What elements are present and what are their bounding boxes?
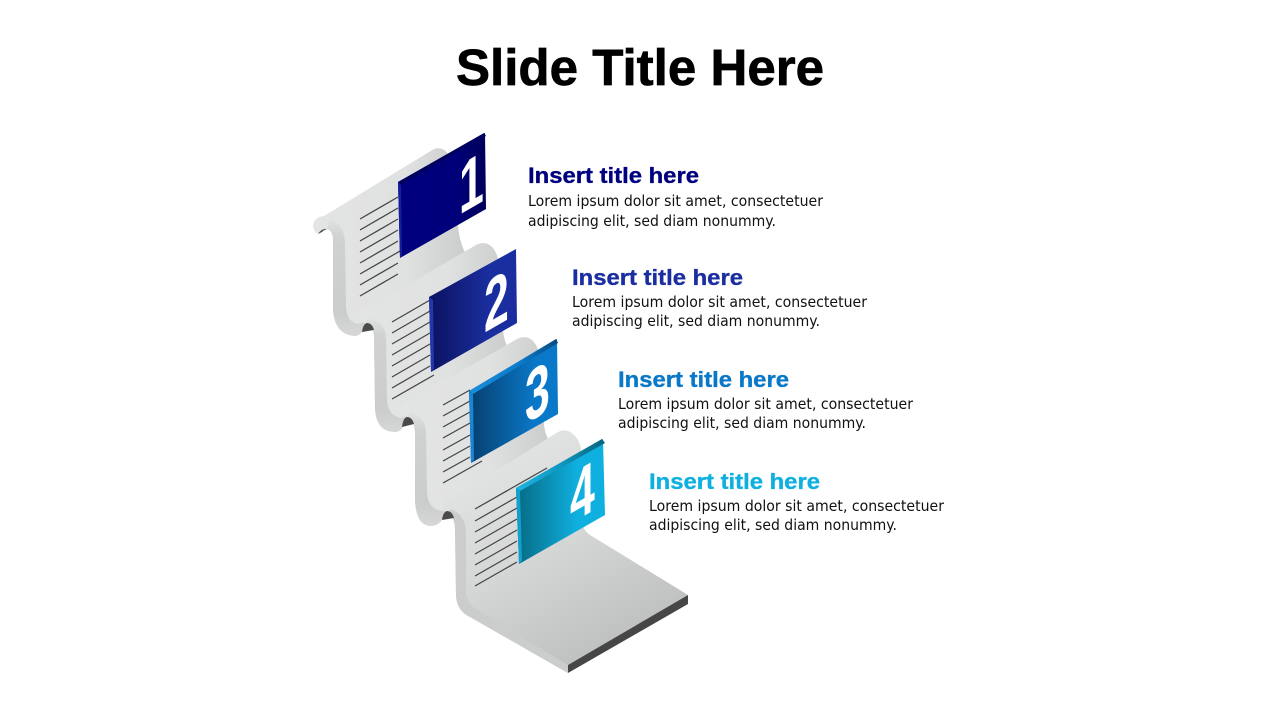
text block 3 xyxy=(618,367,914,432)
text block 3: Insert title here xyxy=(618,367,789,392)
text lines: sheet 2 xyxy=(392,300,434,399)
text block 1: Lorem ipsum dolor sit amet, consectetuer xyxy=(528,192,824,210)
card 4 xyxy=(516,439,605,564)
text block 3: Lorem ipsum dolor sit amet, consectetuer xyxy=(618,395,914,413)
sheet 3 xyxy=(400,337,551,526)
text block 1: Insert title here xyxy=(528,163,699,188)
card 3 xyxy=(469,339,558,463)
text block 4: Insert title here xyxy=(649,469,820,494)
text block 2: Insert title here xyxy=(572,265,743,290)
number 2: 2 xyxy=(484,254,509,349)
number 4: 4 xyxy=(570,445,595,540)
text block 1: adipiscing elit, sed diam nonummy. xyxy=(528,212,776,230)
text block 3: adipiscing elit, sed diam nonummy. xyxy=(618,414,866,432)
sheet 4 xyxy=(442,430,688,673)
text lines: sheet 1 xyxy=(360,197,428,296)
text block 2: adipiscing elit, sed diam nonummy. xyxy=(572,312,820,330)
card 1 xyxy=(398,133,486,258)
text block 1 xyxy=(528,163,824,230)
sheet 2 xyxy=(358,243,510,432)
sheet 1 xyxy=(313,148,468,336)
title: Slide Title Here xyxy=(456,39,824,96)
text lines: sheet 3 xyxy=(443,390,482,483)
number 1: 1 xyxy=(459,136,484,231)
text block 2 xyxy=(572,265,868,330)
text block 2: Lorem ipsum dolor sit amet, consectetuer xyxy=(572,293,868,311)
number 3: 3 xyxy=(525,345,550,440)
stepped document ribbon xyxy=(313,148,688,673)
text block 4: adipiscing elit, sed diam nonummy. xyxy=(649,516,897,534)
text lines: sheet 4 xyxy=(475,468,547,586)
text block 4 xyxy=(649,469,945,534)
text block 4: Lorem ipsum dolor sit amet, consectetuer xyxy=(649,497,945,515)
card 2 xyxy=(429,249,517,372)
